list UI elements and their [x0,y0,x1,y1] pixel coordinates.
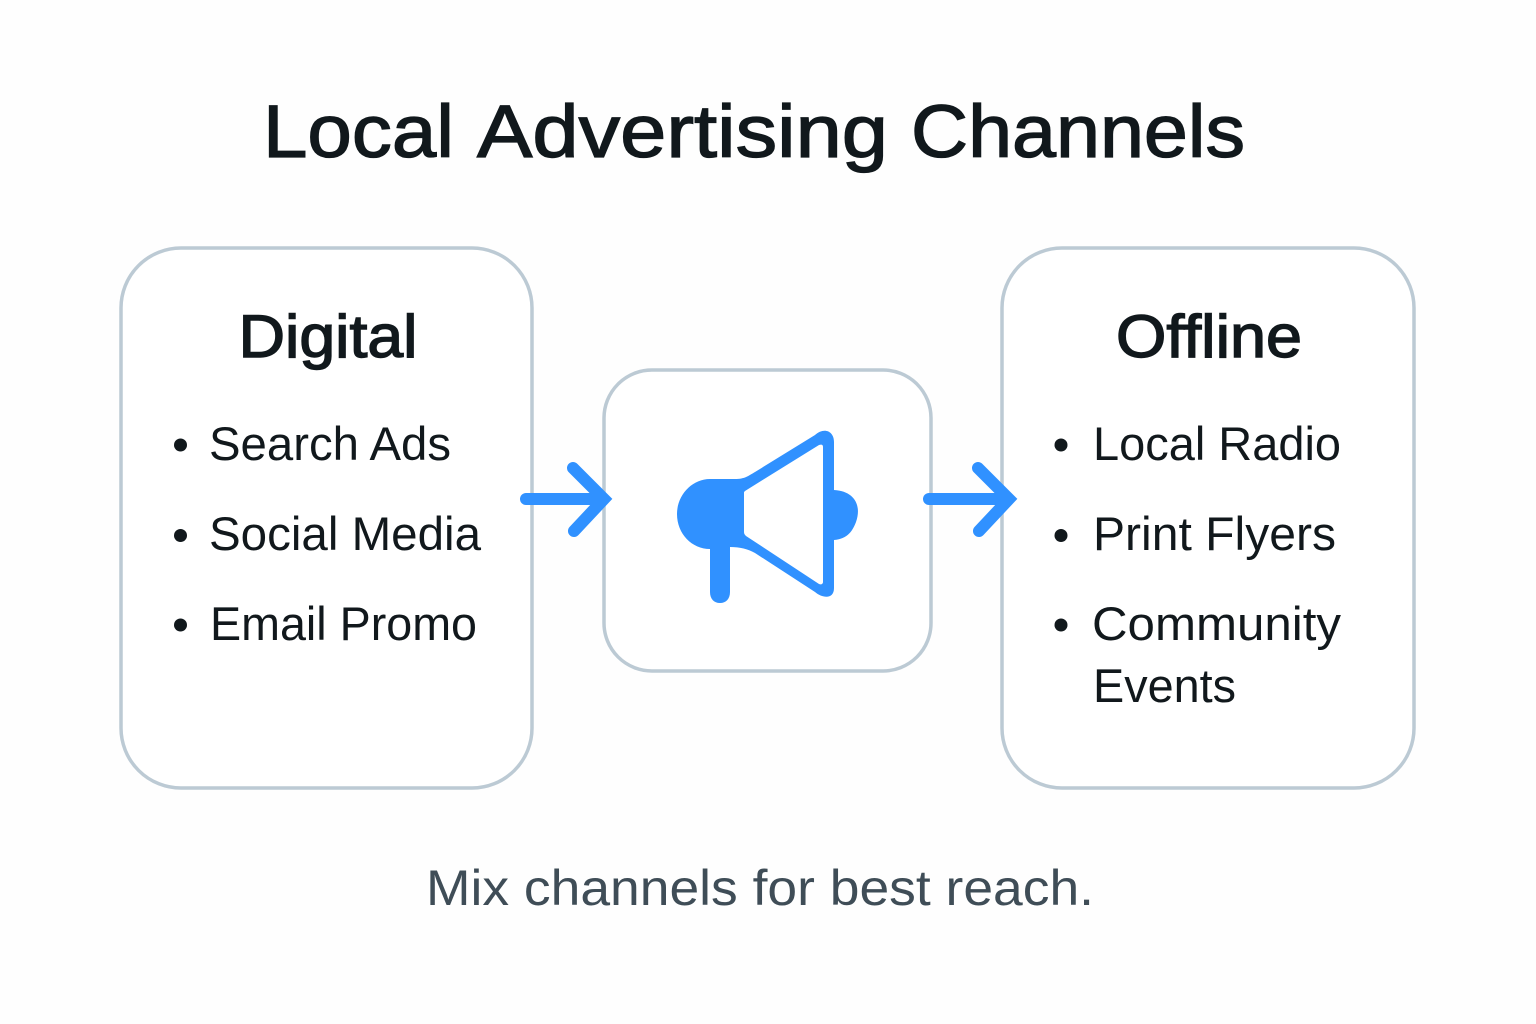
digital item: search ads: Search Ads [209,417,451,470]
offline panel frame [1002,248,1414,788]
arrow: center to offline [929,468,1009,531]
offline item: community events: Events [1093,659,1236,712]
title: Local [263,90,454,173]
offline item: print flyers: Print Flyers [1093,507,1336,560]
icon: megaphone [677,431,858,603]
panel: center megaphone [604,370,931,671]
arrow: digital to center [526,468,604,531]
offline item: community events: Community [1092,597,1342,650]
panel: offline [1002,248,1414,788]
center panel frame [604,370,931,671]
digital item: email promo: Email Promo [210,597,477,650]
panel: digital [121,248,532,788]
offline item: community events [1054,597,1342,712]
digital heading: Digital [238,303,418,370]
digital panel frame [121,248,532,788]
footer caption: Mix channels for best reach. [426,860,1094,916]
title: Channels [911,90,1245,173]
offline heading: Offline [1116,303,1302,370]
title: Advertising [477,90,888,173]
title [263,90,1245,173]
offline item: local radio: Local Radio [1093,417,1341,470]
digital item: social media: Social Media [209,507,482,560]
